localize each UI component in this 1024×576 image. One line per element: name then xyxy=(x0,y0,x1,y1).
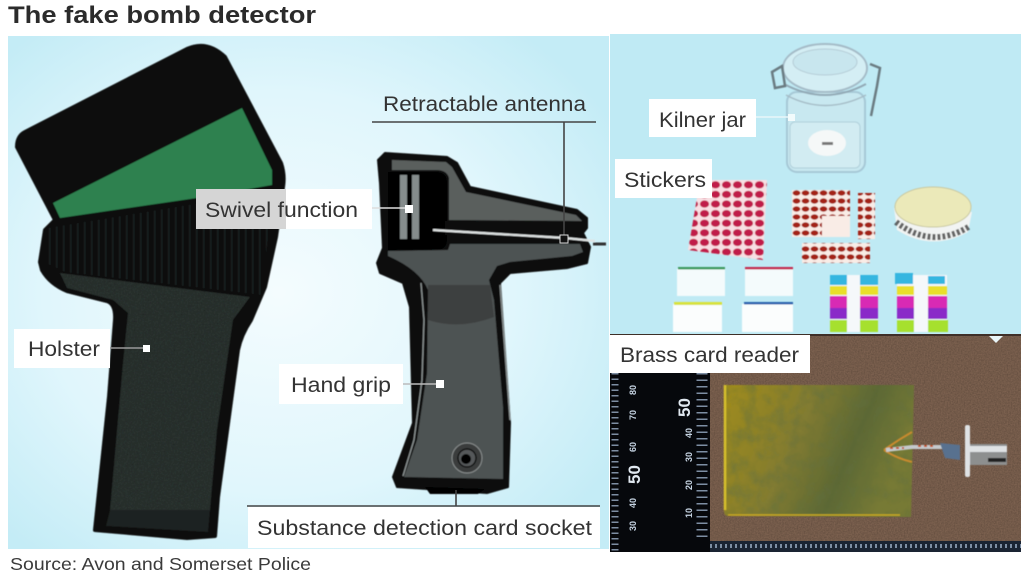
holster strap ribs xyxy=(44,196,272,295)
ruler: 40 xyxy=(628,498,638,508)
title: The fake bomb detector xyxy=(8,2,316,29)
holster xyxy=(17,46,284,538)
label: stickers xyxy=(615,159,712,198)
detector handset xyxy=(377,153,606,494)
ruler: 40 xyxy=(684,428,694,438)
panel: brass card reader photo xyxy=(610,334,1021,552)
ruler xyxy=(610,373,1021,552)
ruler: 50 xyxy=(625,465,644,484)
handset body grey xyxy=(388,244,583,479)
label: hand grip: Hand grip xyxy=(291,374,391,397)
icon: multicoloured test strips xyxy=(830,273,948,332)
grip screw xyxy=(452,443,482,473)
darker upper grip xyxy=(428,285,494,324)
panel: holster and detector photo xyxy=(8,36,609,549)
label: stickers: Stickers xyxy=(624,169,706,192)
label: brass card reader: Brass card reader xyxy=(620,344,799,367)
label: substance detection card socket: Substance detection card socket xyxy=(257,517,592,540)
icon: brass card xyxy=(720,380,920,520)
icon: kilner jar xyxy=(772,44,880,172)
antenna channel and rod xyxy=(445,221,584,235)
label: swivel function: Swivel function xyxy=(205,199,358,222)
icon: roll of tape xyxy=(894,187,972,242)
label: holster: Holster xyxy=(28,338,100,361)
holster leather panel xyxy=(60,273,250,510)
label: kilner jar: Kilner jar xyxy=(659,109,746,132)
ruler: 20 xyxy=(684,480,694,490)
label: brass card reader xyxy=(610,335,810,373)
source line: Source: Avon and Somerset Police xyxy=(10,554,311,574)
icon: white cards with coloured stripes xyxy=(673,267,793,332)
ruler: 50 xyxy=(675,398,694,417)
ruler: 10 xyxy=(684,508,694,518)
ruler: 60 xyxy=(628,442,638,452)
ruler: 30 xyxy=(628,521,638,531)
ruler: 30 xyxy=(684,452,694,462)
ruler: 80 xyxy=(628,385,638,395)
swivel window xyxy=(388,172,447,250)
label: retractable antenna xyxy=(372,93,596,243)
label: holster xyxy=(14,329,150,368)
label: swivel function xyxy=(196,189,413,229)
icon: connector xyxy=(884,425,1007,477)
icon: red dot sticker sheets xyxy=(688,180,875,263)
ruler: 70 xyxy=(628,410,638,420)
label: hand grip xyxy=(279,364,444,404)
grip highlights xyxy=(403,283,510,476)
label: retractable antenna: Retractable antenna xyxy=(383,93,586,116)
icon: small white marker xyxy=(989,336,1003,343)
holster green lining xyxy=(53,108,272,218)
panel: kit contents photo xyxy=(610,34,1021,335)
label: substance detection card socket xyxy=(247,490,600,548)
label: kilner jar xyxy=(649,99,795,137)
handset upper body grey xyxy=(392,160,582,221)
